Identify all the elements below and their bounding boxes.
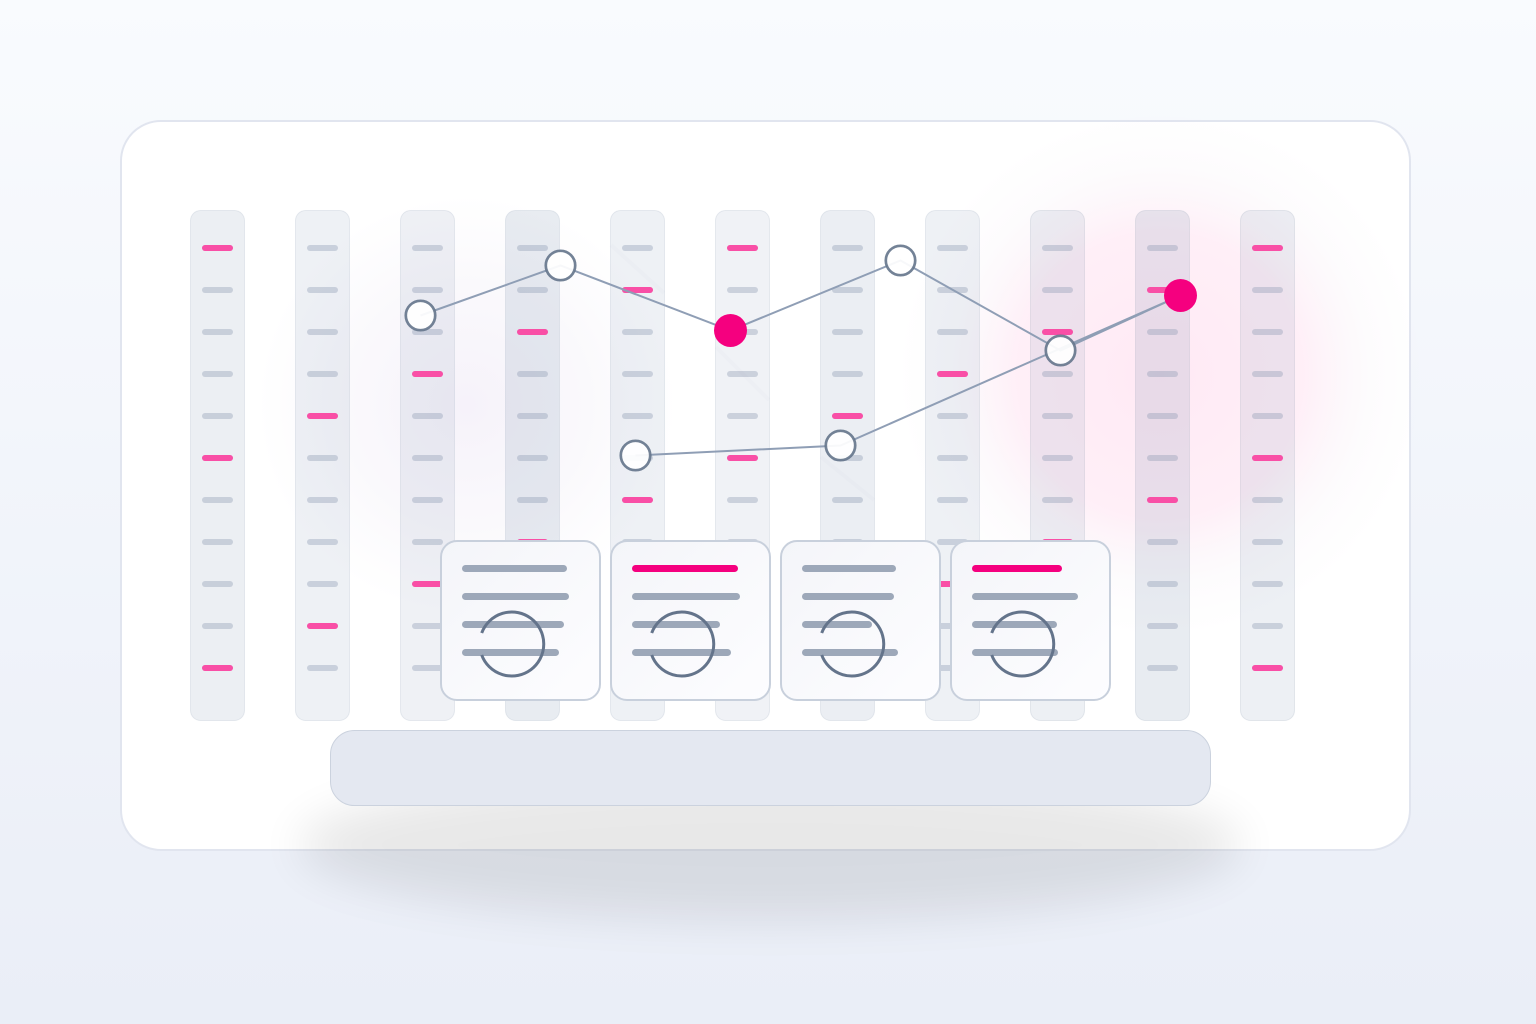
column 7 <box>820 210 874 720</box>
column 8 <box>926 210 980 720</box>
pink glow behind chart <box>898 113 1422 637</box>
column 11 <box>1240 210 1294 720</box>
card 3 <box>781 541 940 700</box>
ground shadow <box>298 770 1242 920</box>
column 6 <box>716 210 770 720</box>
column 4 <box>506 210 560 720</box>
card 1 <box>441 541 600 700</box>
upper connector line <box>420 260 1180 350</box>
column 1 <box>190 210 244 720</box>
purple glow behind chart <box>257 195 677 615</box>
column 2 <box>296 210 350 720</box>
timeline columns <box>190 210 1294 720</box>
chart nodes <box>406 246 1197 470</box>
main white panel <box>121 121 1410 850</box>
bottom bar <box>330 730 1210 806</box>
column 3 <box>400 210 454 720</box>
column 9 <box>1030 210 1084 720</box>
column 10 <box>1136 210 1190 720</box>
lower connector line <box>636 296 1180 456</box>
card 2 <box>611 541 770 700</box>
column 5 <box>610 210 664 720</box>
card 4 <box>951 541 1110 700</box>
